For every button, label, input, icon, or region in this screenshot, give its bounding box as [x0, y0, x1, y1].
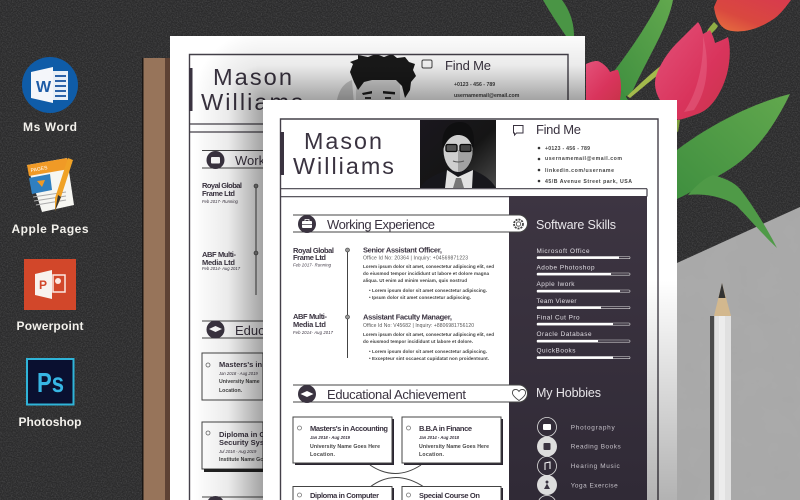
job: royal global: aliqua. Ut enim ad minim veniam, quis nostrud [363, 278, 467, 283]
card: bba: Location. [419, 452, 445, 458]
card: bba [402, 417, 503, 465]
fading shade on front page edge [647, 280, 677, 500]
back page job entries: Media Ltd [202, 258, 235, 267]
my hobbies heading: My Hobbies [536, 386, 601, 400]
name heading [293, 128, 396, 179]
job: abf multi-media: • Lorem ipsum dolor sit amet consectetur adipiscing. [369, 349, 487, 354]
card: bba: B.B.A in Finance [419, 424, 472, 433]
back page education cards: Masters's in A [219, 360, 270, 369]
job: royal global: Senior Assistant Officer, [363, 246, 442, 254]
back page find me: usernamemail@email.com [454, 93, 520, 99]
contact details: usernamemail@email.com [545, 156, 622, 162]
accent bar [280, 132, 284, 175]
hobbies list: Photography [571, 424, 615, 432]
skills chart: Apple Iwork [536, 281, 575, 288]
job: royal global: Lorem ipsum dolor sit amet, consectetur adipiscing elit, sed [363, 264, 494, 269]
app: ms word [22, 57, 78, 134]
connector arcs [370, 465, 424, 487]
card: special course: Special Course On [419, 491, 480, 500]
skills chart: Microsoft Office [536, 248, 590, 255]
job: royal global: Feb 2017- Running [293, 262, 332, 268]
card: diploma [293, 486, 394, 500]
back page divider lines [189, 124, 568, 132]
educational achievement header [293, 385, 528, 403]
contact details: +0123 - 456 - 789 [545, 146, 590, 152]
back page portrait [337, 55, 416, 100]
back page education cards: Jan 2018 - Aug 2019 [218, 371, 258, 376]
name heading: Williams [293, 153, 396, 179]
card: masters: Jan 2018 - Aug 2019 [310, 435, 351, 440]
job: abf multi-media: Lorem ipsum dolor sit amet, consectetur adipiscing elit, sed [363, 332, 494, 337]
card: diploma: Diploma in Computer [310, 491, 379, 500]
app: photoshop [18, 359, 82, 429]
back page job entries: Frame Ltd [202, 189, 235, 198]
skills chart: Final Cut Pro [536, 314, 580, 322]
job: royal global: Royal Global [293, 246, 334, 255]
job: royal global: • Ipsum dolor sit amet consectetur adipiscing. [369, 295, 471, 300]
card: masters: Location. [310, 452, 336, 458]
card: bba: Jan 2014 - Aug 2018 [419, 435, 460, 440]
icon: pages: PAGES [30, 165, 49, 174]
hobbies list: Hearing Music [571, 463, 620, 470]
back page job entries: ABF Multi- [202, 250, 236, 259]
back page job entries: Feb 2017- Running [202, 199, 239, 204]
back page frame [190, 54, 568, 500]
card: masters: Masters's in Accounting [310, 424, 388, 433]
contact details: 45/B Avenue Street park, USA [545, 179, 632, 185]
icon: speech bubble [514, 126, 523, 135]
back page job entries: Royal Global [202, 181, 242, 190]
app: apple pages: Apple Pages [12, 222, 89, 236]
working experience header: Working Experience [327, 217, 435, 232]
back page accent bar [189, 68, 192, 111]
back page education cards: University Name [219, 379, 260, 385]
back page education cards: Institute Name Go [219, 457, 263, 463]
card: masters: University Name Goes Here [310, 444, 380, 450]
icon: word: W [36, 79, 52, 96]
find me contact block [514, 122, 632, 185]
back page working experience header [202, 150, 282, 169]
educational achievement header: Educational Achievement [327, 387, 466, 402]
shadow cast by front page [193, 36, 585, 500]
job: abf multi-media: Assistant Faculty Manager, [363, 312, 452, 322]
card: masters [293, 417, 394, 465]
timeline [346, 248, 350, 358]
back page education cards: Location. [219, 388, 243, 394]
job: abf multi-media: do eiusmod tempor incididunt ut labore et dolore. [363, 339, 473, 344]
skills chart: Oracle Database [536, 331, 592, 338]
app: photoshop: Photoshop [18, 415, 82, 429]
back page name: Williams [201, 89, 305, 115]
app: powerpoint: Powerpoint [16, 319, 84, 333]
back page working experience header: Working [235, 153, 282, 168]
back page education cards [202, 353, 270, 500]
job: royal global: • Lorem ipsum dolor sit amet consectetur adipiscing. [369, 288, 487, 293]
find me heading: Find Me [536, 122, 581, 137]
skills chart: Adobe Photoshop [536, 264, 595, 272]
app: apple pages [12, 158, 89, 236]
back page education cards: Jul 2018 - Aug 2019 [218, 449, 257, 454]
hobbies list [537, 418, 621, 500]
back page job entries [202, 181, 258, 295]
hobbies list: Yoga Exercise [571, 482, 618, 490]
card: bba: University Name Goes Here [419, 444, 489, 450]
job: royal global: do eiusmod tempor incididunt ut labore et dolore magna [363, 271, 489, 276]
divider lines [280, 189, 647, 197]
skills chart: QuickBooks [536, 348, 576, 354]
app: ms word: Ms Word [23, 120, 77, 134]
icon: powerpoint: P [39, 278, 47, 292]
contact details [538, 146, 632, 185]
job: royal global [293, 246, 494, 300]
skills chart: Team Viewer [536, 298, 577, 305]
icon: photoshop: Ps [37, 367, 64, 398]
contact details: linkedin.com/username [545, 168, 614, 174]
back page find me [422, 58, 520, 99]
job: royal global: Frame Ltd [293, 253, 326, 262]
job: abf multi-media: Media Ltd [293, 320, 326, 329]
software skills heading: Software Skills [536, 218, 616, 232]
working experience header [293, 215, 528, 233]
name heading: Mason [304, 128, 384, 154]
icon: gear [514, 220, 523, 228]
job: royal global: Office Id No: 20364 | Inquiry: +04569871223 [363, 256, 468, 262]
back page job entries: Feb 2014- Aug 2017 [202, 266, 241, 271]
back page education header [202, 320, 265, 338]
back page name: Mason [213, 64, 294, 90]
dark sidebar [509, 196, 647, 500]
hobbies list: Reading Books [571, 444, 621, 450]
skills chart [536, 248, 630, 359]
app: powerpoint [16, 259, 84, 333]
icon: heart [512, 389, 526, 400]
brown paper sheet [142, 58, 173, 500]
job: abf multi-media: Feb 2014- Aug 2017 [293, 330, 334, 335]
card: special course [402, 486, 503, 500]
back resume page [170, 36, 585, 500]
back page education cards: Diploma in Co [219, 430, 270, 439]
pencil [710, 283, 731, 500]
front resume page [263, 100, 677, 500]
back page name [201, 64, 305, 115]
page frame [280, 119, 658, 500]
back page education cards: Security Syse [219, 438, 268, 447]
job: abf multi-media: ABF Multi- [293, 312, 328, 321]
back page find me: Find Me [445, 58, 491, 73]
back page education header: Educ [235, 323, 265, 338]
tulips and leaves [543, 0, 791, 248]
job: abf multi-media: • Excepteur sint occaecat cupidatat non proidentsunt. [369, 356, 489, 361]
job: abf multi-media: Office Id No: V45682 | Inquiry: +8806981756120 [363, 323, 474, 329]
background: concrete corner [677, 207, 800, 500]
icon: graduation cap [298, 385, 316, 403]
icon: briefcase [298, 215, 316, 233]
job: abf multi-media [293, 312, 494, 361]
back page find me: +0123 - 456 - 789 [454, 82, 495, 88]
portrait photo [420, 120, 496, 188]
